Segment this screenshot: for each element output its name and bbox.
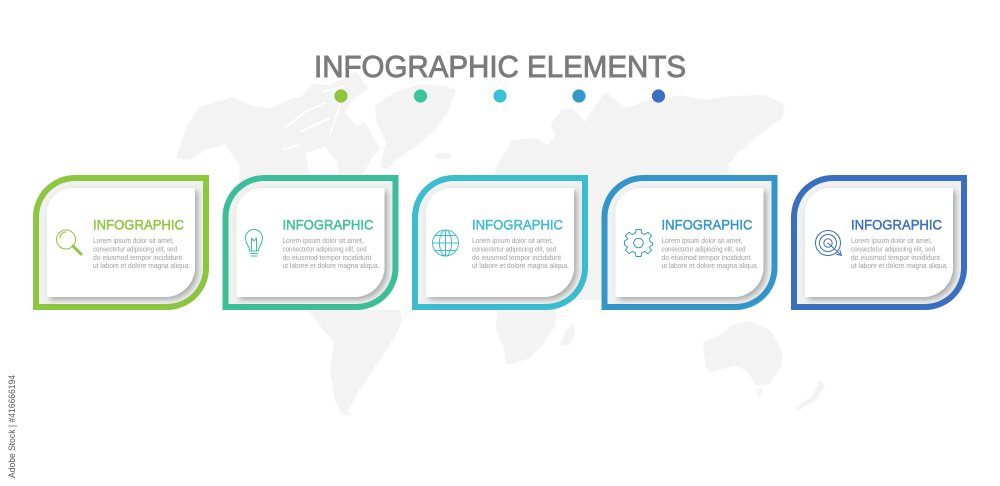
text block 5: do eiusmod tempor incididunt bbox=[851, 253, 941, 262]
text block 1 bbox=[93, 236, 190, 270]
map: madagascar bbox=[560, 322, 575, 346]
map: iceland bbox=[435, 152, 451, 160]
icon: gear bbox=[624, 230, 652, 256]
map: north america bbox=[176, 72, 380, 310]
card frame 1 bbox=[33, 175, 209, 310]
title: INFOGRAPHIC ELEMENTS bbox=[314, 49, 686, 84]
card frame 5 bbox=[791, 175, 967, 310]
heading 5: INFOGRAPHIC bbox=[851, 216, 942, 232]
white card 4 bbox=[616, 188, 764, 297]
panel: step 4 bbox=[602, 175, 778, 310]
map: south america bbox=[308, 310, 402, 416]
map: greenland bbox=[375, 84, 456, 170]
map: new zealand bbox=[795, 380, 825, 411]
text block 4: do eiusmod tempor incididunt bbox=[662, 253, 751, 262]
text block 4: ut labore et dolore magna aliqua. bbox=[662, 261, 758, 270]
text block 1: ut labore et dolore magna aliqua. bbox=[93, 261, 190, 270]
panel: step 1 bbox=[33, 175, 209, 310]
map: arctic channels bbox=[282, 86, 345, 150]
text block 3: Lorem ipsum dolor sit amet, bbox=[472, 236, 553, 245]
white card 3 bbox=[426, 188, 574, 297]
map: tasmania bbox=[756, 388, 764, 398]
text block 1: Lorem ipsum dolor sit amet, bbox=[93, 236, 174, 245]
map: eurasia bbox=[490, 92, 785, 300]
card frame 2 bbox=[222, 175, 398, 310]
panel: step 2 bbox=[222, 175, 398, 310]
text block 5: consectetur adipiscing elit, sed bbox=[851, 244, 935, 254]
text block 3: ut labore et dolore magna aliqua. bbox=[472, 261, 569, 270]
text block 2: ut labore et dolore magna aliqua. bbox=[282, 261, 380, 270]
text block 2: consectetur adipiscing elit, sed bbox=[282, 244, 366, 254]
white card 5 bbox=[805, 188, 953, 297]
white card 1 bbox=[47, 188, 195, 297]
world map bbox=[176, 72, 825, 416]
card frame 3 bbox=[412, 175, 588, 310]
icon: light bulb bbox=[246, 230, 262, 256]
white card 2 bbox=[236, 188, 384, 297]
text block 2: do eiusmod tempor incididunt bbox=[282, 253, 372, 262]
panel: step 3 bbox=[412, 175, 588, 310]
text block 1: do eiusmod tempor incididunt bbox=[93, 253, 183, 262]
text block 1: consectetur adipiscing elit, sed bbox=[93, 244, 177, 254]
text block 4 bbox=[662, 236, 758, 270]
text block 5: Lorem ipsum dolor sit amet, bbox=[851, 236, 932, 245]
vertical caption: Adobe Stock | #416666194 bbox=[7, 375, 17, 478]
heading 4: INFOGRAPHIC bbox=[662, 216, 752, 232]
progress dots bbox=[334, 89, 665, 103]
text block 2: Lorem ipsum dolor sit amet, bbox=[282, 236, 364, 245]
heading 2: INFOGRAPHIC bbox=[282, 216, 374, 232]
text block 3 bbox=[472, 236, 569, 270]
heading 1: INFOGRAPHIC bbox=[93, 216, 184, 232]
text block 4: consectetur adipiscing elit, sed bbox=[662, 244, 746, 254]
text block 5: ut labore et dolore magna aliqua. bbox=[851, 261, 948, 270]
map: australia bbox=[703, 321, 782, 386]
icon: target bbox=[816, 230, 842, 256]
heading 3: INFOGRAPHIC bbox=[472, 216, 563, 232]
text block 5 bbox=[851, 236, 948, 270]
text block 3: do eiusmod tempor incididunt bbox=[472, 253, 562, 262]
text block 4: Lorem ipsum dolor sit amet, bbox=[662, 236, 742, 245]
map: sea of okhotsk bbox=[728, 146, 752, 178]
map: africa bbox=[496, 310, 556, 364]
card frame 4 bbox=[602, 175, 778, 310]
text block 2 bbox=[282, 236, 380, 270]
icon: magnifier bbox=[56, 230, 81, 254]
text block 3: consectetur adipiscing elit, sed bbox=[472, 244, 556, 254]
map: hudson bay bbox=[305, 147, 338, 184]
icon: globe bbox=[432, 230, 458, 256]
panel: step 5 bbox=[791, 175, 967, 310]
